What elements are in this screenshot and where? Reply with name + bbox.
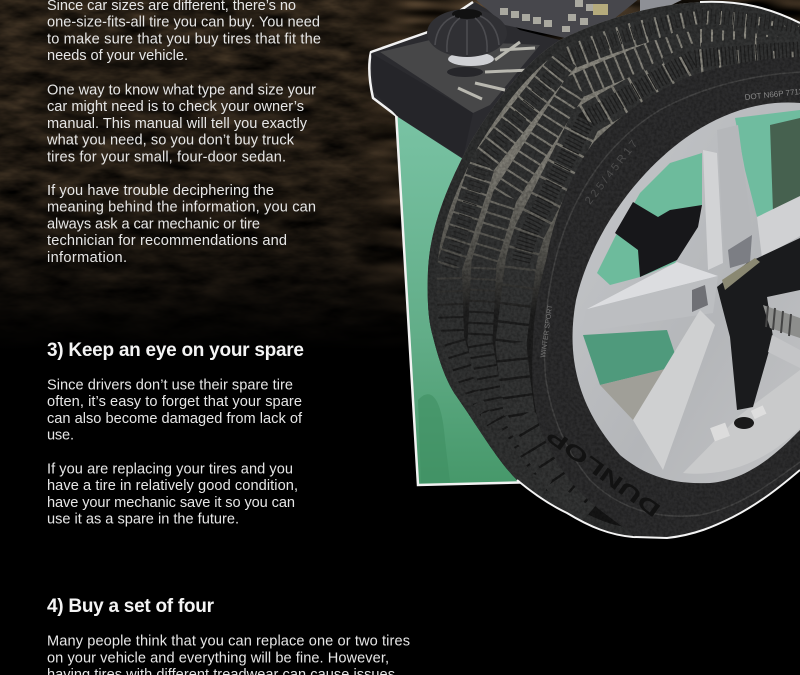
text block: spare tire: can also become damaged from lack of bbox=[47, 411, 303, 427]
axle and clamp bbox=[615, 202, 800, 410]
text block: choosing the right size: what you need, so you don’t buy truck bbox=[46, 132, 295, 148]
text block: choosing the right size: One way to know what type and size your bbox=[47, 82, 316, 98]
text block: spare tire: have a tire in relatively good condition, bbox=[47, 478, 298, 494]
sidewall bbox=[532, 57, 800, 540]
text block: choosing the right size: meaning behind the information, you can bbox=[47, 200, 316, 216]
heading: buy a set of four: 4) Buy a set of four bbox=[47, 596, 215, 617]
text block: choosing the right size: needs of your vehicle. bbox=[47, 48, 188, 64]
heading: keep an eye on your spare: 3) Keep an eye on your spare bbox=[47, 340, 304, 361]
text block: choosing the right size: tires for your small, four-door sedan. bbox=[47, 149, 286, 165]
tread blocks: outer band bbox=[449, 16, 800, 513]
machine tray bbox=[369, 2, 560, 159]
spoke shading bbox=[587, 262, 718, 309]
text block: spare tire: If you are replacing your tires and you bbox=[47, 461, 293, 477]
text block: set of four: on your vehicle and everything will be fine. However, bbox=[47, 650, 389, 666]
text block: choosing the right size: If you have trouble deciphering the bbox=[47, 183, 274, 199]
tread shoulder edge bbox=[428, 2, 800, 537]
text block: spare tire: Since drivers don’t use their spare tire bbox=[47, 377, 293, 393]
sidewall lettering: 225/45R17 bbox=[583, 136, 642, 207]
text block: choosing the right size: car might need is to check your owner’s bbox=[47, 99, 304, 115]
text block: choosing the right size: one-size-fits-all tire you can buy. You need bbox=[47, 15, 320, 31]
text block: spare tire: have your mechanic save it so you can bbox=[47, 495, 295, 511]
text block: set of four bbox=[47, 634, 410, 675]
text block: spare tire: use it as a spare in the future. bbox=[47, 512, 239, 528]
background: sand texture fading to black bbox=[0, 0, 800, 329]
sidewall lettering: DUNLOP bbox=[543, 424, 665, 521]
sidewall lettering bbox=[540, 87, 800, 521]
text block: choosing the right size: manual. This manual will tell you exactly bbox=[47, 116, 308, 132]
tread blocks: inner band bbox=[511, 50, 800, 510]
text block: spare tire bbox=[47, 377, 303, 528]
balancing cone bbox=[427, 9, 507, 57]
text block: choosing the right size: technician for recommendations and bbox=[47, 233, 287, 249]
text block: choosing the right size: always ask a car mechanic or tire bbox=[47, 216, 260, 232]
text block: set of four: Many people think that you can replace one or two tires bbox=[47, 634, 410, 650]
tread grooves base bbox=[420, 0, 800, 545]
text block: choosing the right size bbox=[46, 0, 321, 266]
rim openings bbox=[597, 153, 702, 285]
block sipes bbox=[521, 50, 800, 262]
text block: spare tire: often, it’s easy to forget that your spare bbox=[47, 394, 302, 410]
machine console display bbox=[474, 0, 686, 38]
tread blocks: middle band bbox=[480, 37, 800, 518]
machine cabinet: green panel bbox=[396, 112, 540, 485]
text block: choosing the right size: to make sure that you buy tires that fit the bbox=[47, 32, 321, 48]
photo: tire on a balancing machine bbox=[369, 0, 800, 545]
alloy rim bbox=[573, 103, 800, 483]
tire bbox=[420, 0, 800, 545]
text block: spare tire: use. bbox=[47, 428, 74, 444]
text block: choosing the right size: information. bbox=[47, 250, 127, 266]
sidewall lettering: WINTER SPORT bbox=[540, 304, 555, 358]
